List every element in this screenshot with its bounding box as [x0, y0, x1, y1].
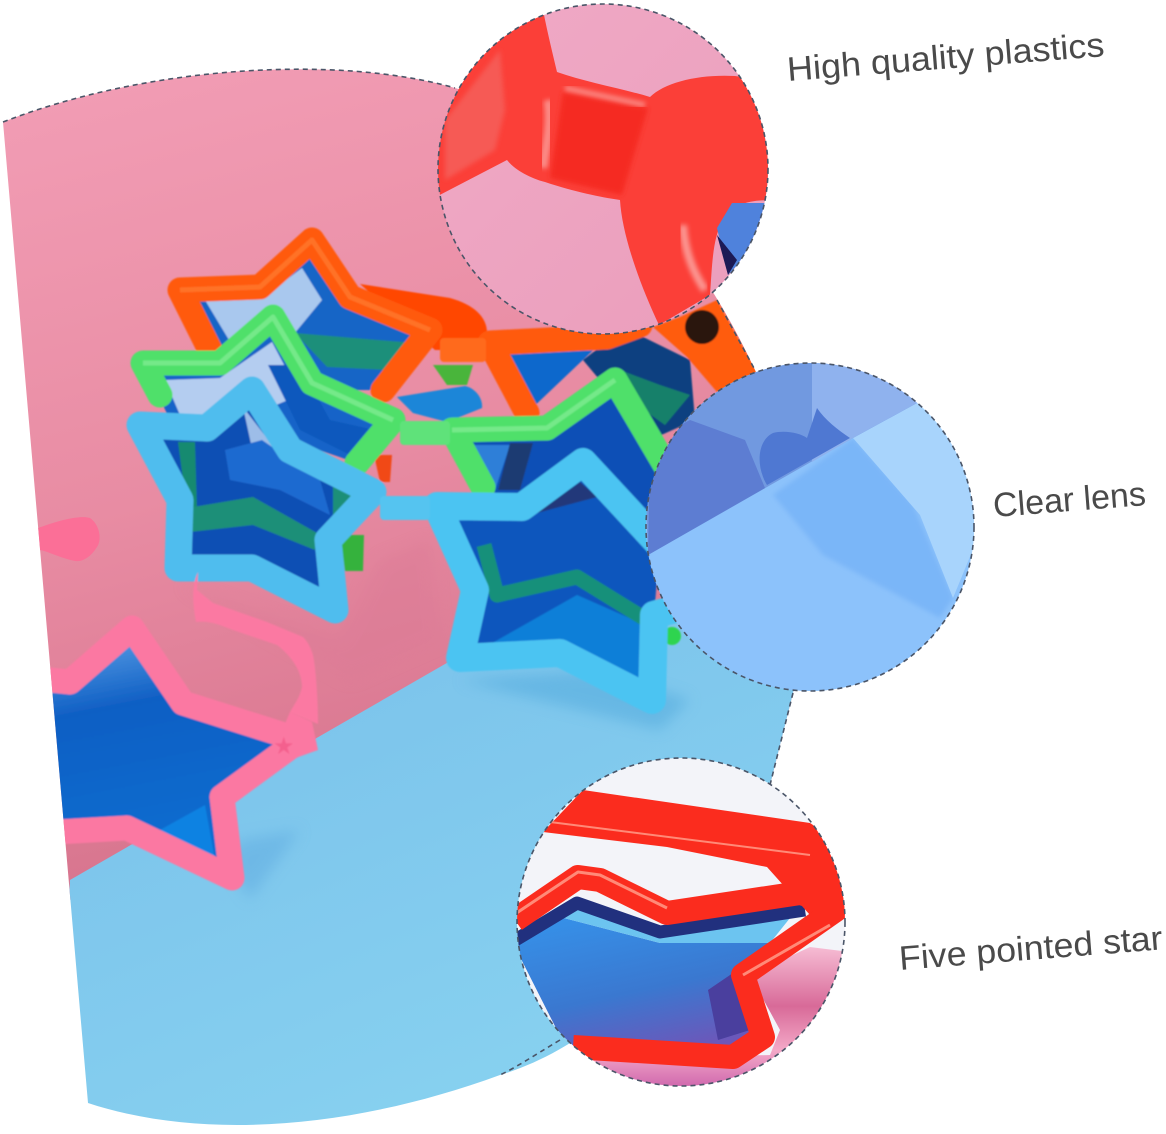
blue bridge — [380, 496, 430, 520]
orange left lens — [198, 258, 411, 392]
green frame — [143, 317, 668, 487]
detail circle: high quality plastics — [430, 0, 775, 340]
red star frame — [515, 877, 843, 1057]
circle background — [510, 750, 855, 1095]
dark lens side — [708, 973, 750, 1040]
orange temple and fins — [360, 284, 487, 350]
main product photo — [0, 40, 830, 1134]
pink backdrop — [0, 40, 820, 900]
pink strap piece — [38, 517, 100, 561]
red bridge shading — [550, 92, 648, 195]
blue star glasses — [140, 390, 740, 700]
shadow shape — [760, 408, 850, 485]
orange star glasses — [180, 240, 757, 571]
blue frame — [140, 390, 373, 610]
detail circle: five pointed star — [510, 750, 855, 1095]
pink surface — [560, 947, 850, 1095]
pink frame — [30, 628, 300, 878]
left wing tint — [445, 50, 505, 180]
frame highlights — [515, 872, 830, 975]
pink temple arm — [193, 572, 318, 724]
lower light lens — [640, 355, 980, 695]
blue surface — [70, 622, 794, 1125]
circle background — [430, 0, 775, 340]
orange frame — [180, 240, 640, 413]
small star emboss: ★ — [273, 733, 295, 760]
upper left dark tone — [648, 420, 765, 555]
pink lens — [40, 628, 300, 878]
blue left lens — [162, 410, 334, 588]
pale lens edge — [560, 905, 790, 943]
green right lens — [472, 398, 656, 512]
right light lens — [853, 400, 985, 598]
red top bar — [543, 790, 850, 915]
pink star glasses — [30, 572, 318, 878]
green left lens — [163, 336, 374, 460]
upper lens band — [640, 355, 917, 555]
orange hinge piece — [653, 300, 757, 392]
pink hinge — [286, 712, 319, 758]
dashed photo outline — [3, 69, 793, 1075]
orange bridge — [440, 338, 486, 362]
mid lens tone — [773, 438, 953, 618]
blue lens corner — [717, 203, 764, 275]
detail circle: clear lens — [640, 355, 985, 695]
blue right lens — [458, 506, 658, 644]
navy lens rim — [512, 903, 805, 942]
blue lens — [515, 917, 775, 1057]
soft shadows — [241, 670, 686, 894]
red highlights — [683, 225, 705, 290]
orange right lens — [509, 349, 594, 406]
green star glasses — [143, 317, 681, 645]
label: clear lens: Clear lens — [992, 475, 1147, 525]
label: high quality plastics: High quality plastics — [786, 26, 1106, 89]
label: five pointed star: Five pointed star — [898, 919, 1164, 978]
dark pom-pom — [685, 310, 719, 344]
red plastic frame — [430, 10, 775, 325]
green tab — [663, 627, 681, 645]
upper right tone — [812, 355, 917, 462]
green bridge — [400, 421, 450, 445]
